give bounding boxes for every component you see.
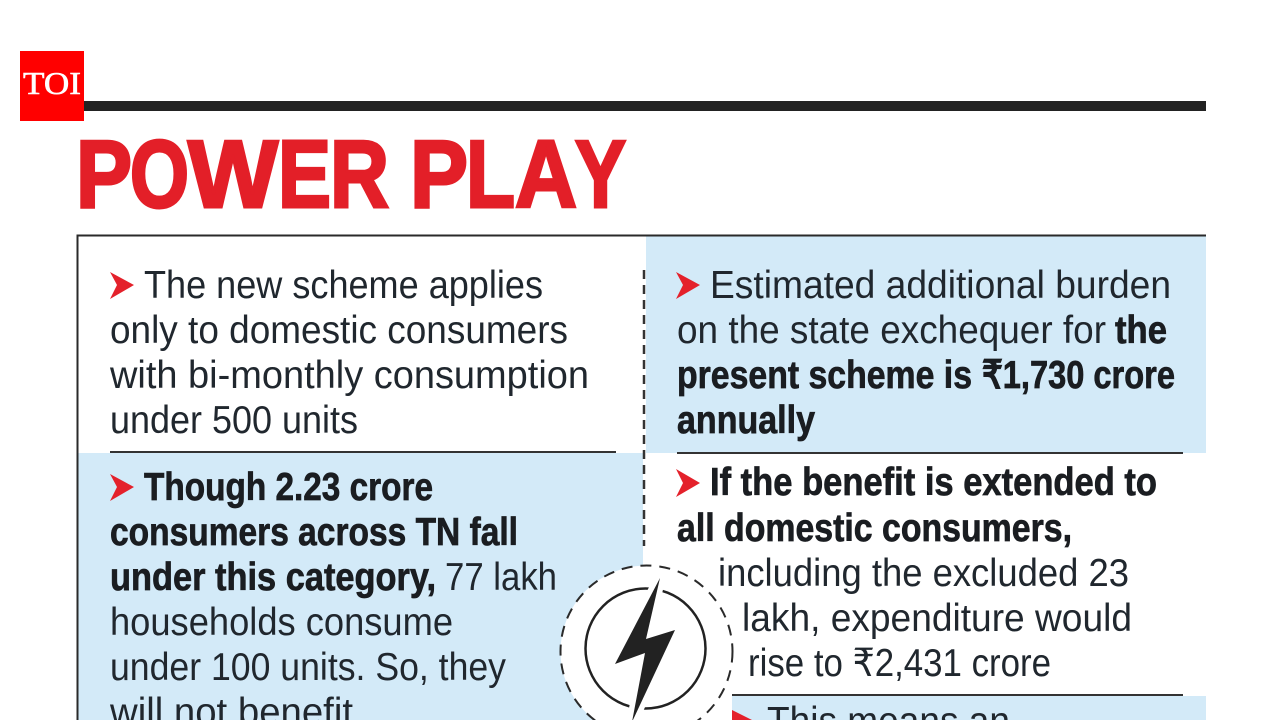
text block: extended benefit: lakh, expenditure would: [742, 597, 1132, 640]
title: P: [76, 121, 132, 228]
text block: consumers: households consume: [110, 601, 453, 644]
panel: blue background bottom right: [732, 696, 1206, 720]
vertical dashed divider: [643, 270, 645, 546]
text block: additional burden: ₹1,730 crore: [982, 354, 1175, 397]
divider left: [110, 451, 616, 453]
text block: consumers: [109, 466, 557, 720]
title: [76, 121, 626, 228]
text block: consumers: 77 lakh: [445, 556, 557, 599]
text block: additional burden: [676, 264, 1175, 442]
text block: consumers: Though 2.23 crore: [144, 466, 433, 509]
text block: additional burden: the: [1115, 309, 1167, 352]
text block: additional burden: present scheme is: [677, 354, 972, 397]
text block: scheme applicability: with bi-monthly consumption: [109, 354, 589, 397]
text block: extended benefit: all domestic consumers,: [677, 507, 1072, 550]
text block: consumers: under this category,: [110, 556, 436, 599]
title: W: [188, 121, 278, 228]
divider right bottom: [732, 694, 1183, 696]
title: R: [330, 121, 389, 228]
title: E: [278, 121, 331, 228]
title: A: [515, 121, 577, 228]
text block: scheme applicability: [109, 264, 589, 442]
logo: TOI: [20, 51, 84, 121]
text block: consumers: consumers across TN fall: [110, 511, 518, 554]
text block: scheme applicability: under 500 units: [110, 399, 358, 442]
text block: extended benefit: If the benefit is extended to: [710, 461, 1157, 504]
text block: additional burden: on the state exchequer for: [677, 309, 1106, 352]
text block: extended benefit: including the excluded 23: [718, 552, 1129, 595]
panel: blue background left: [78, 453, 643, 720]
text block: consumers: under 100 units. So, they: [110, 646, 506, 689]
title: P: [410, 121, 468, 228]
title: L: [466, 121, 515, 228]
logo: TOI: TOI: [23, 65, 81, 101]
title: Y: [575, 121, 626, 228]
text block: extended benefit: rise to ₹2,431 crore: [748, 642, 1051, 685]
divider right top: [677, 452, 1183, 454]
panel: blue background top right: [646, 236, 1206, 453]
text block: additional burden: Estimated additional burden: [710, 264, 1171, 307]
title: O: [130, 121, 189, 228]
top rule: [84, 101, 1206, 111]
frame: [78, 236, 1206, 720]
text block: scheme applicability: The new scheme applies: [144, 264, 543, 307]
text block: scheme applicability: only to domestic consumers: [110, 309, 568, 352]
text block: additional burden: annually: [677, 399, 815, 442]
text block: extended benefit: [676, 461, 1157, 685]
icon: lightning bolt badge: [560, 566, 732, 720]
